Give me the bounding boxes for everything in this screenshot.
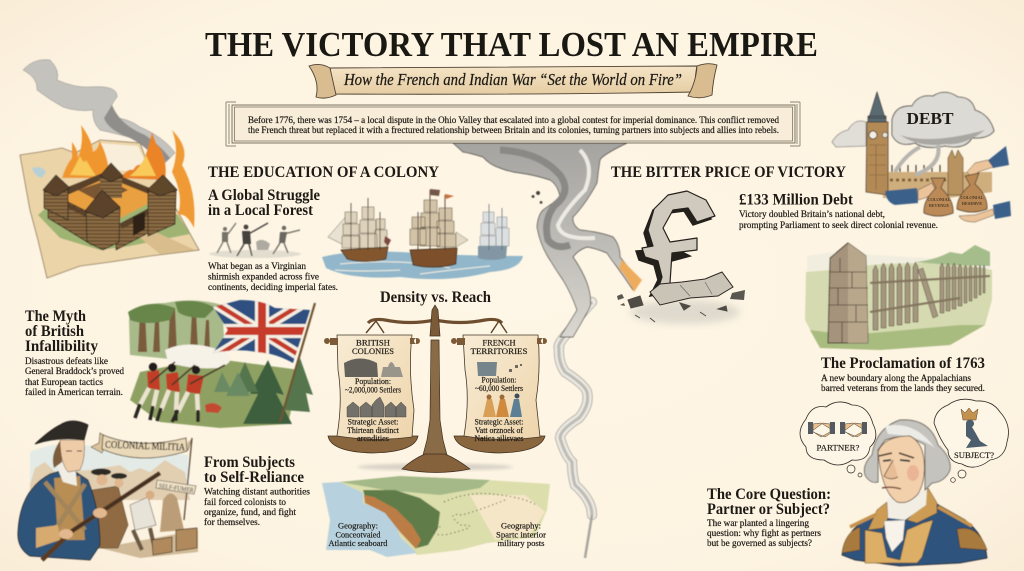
left asset value line two: arendities	[357, 433, 390, 443]
icon: native allies	[483, 394, 522, 417]
left asset value: Thirtean distinct	[347, 425, 400, 435]
label line one: Geography:	[338, 520, 378, 530]
upper right sleeve and hand	[986, 146, 1009, 168]
coat	[842, 503, 987, 566]
icon: handshake one	[808, 422, 835, 437]
left asset label: Strategic Asset:	[348, 416, 398, 426]
ornament left	[226, 102, 236, 146]
heading: The Core Question:	[707, 486, 831, 503]
body line two: General Braddock’s proved	[25, 366, 124, 377]
fence rail	[870, 276, 990, 312]
musket	[42, 473, 160, 560]
heading: The Proclamation of 1763	[821, 355, 985, 372]
banner pole	[184, 438, 192, 520]
pine trees	[243, 360, 292, 424]
right asset value line two: Natica ailisvaes	[474, 433, 524, 443]
section heading: education: THE EDUCATION OF A COLONY	[208, 164, 439, 181]
reserve bag	[957, 173, 987, 212]
cloud label: DEBT	[906, 109, 954, 128]
label line two: Spartc interior	[496, 530, 546, 540]
body: Victory doubled Britain’s national debt,	[739, 209, 885, 220]
parliament tower	[948, 150, 963, 195]
scale beam	[368, 319, 502, 323]
text block: core question	[707, 486, 831, 549]
rubble	[650, 272, 733, 305]
text block: global struggle	[208, 187, 338, 293]
body: Watching distant authorities	[204, 486, 310, 498]
icon: scattered dots	[509, 364, 522, 372]
redcoat soldiers	[135, 362, 225, 422]
epaulet right	[957, 528, 987, 550]
town	[30, 460, 190, 500]
ocean	[322, 482, 417, 557]
bag label one: COLONIAL	[928, 197, 951, 202]
neck stock	[55, 462, 77, 486]
body line three: that European tactics	[25, 377, 103, 388]
forest	[363, 490, 440, 548]
body line two: shirmish expanded across five	[208, 272, 319, 282]
icon: kneeling subject	[966, 420, 988, 448]
field	[805, 262, 992, 350]
background militia men	[92, 486, 128, 548]
left scroll heading: BRITISH	[356, 338, 390, 348]
body line three: continents, deciding imperial fates.	[208, 282, 338, 293]
right scroll heading line two: TERRITORIES	[470, 346, 528, 356]
cross belts	[45, 482, 85, 530]
left population label: Population:	[355, 376, 391, 386]
lower right sleeve and hand	[993, 201, 1011, 219]
intro line two: the French threat but replaced it with a frectured relationship between Britain and its colonies, turning partners into subjects and allies into rebels.	[248, 125, 779, 136]
debt cloud	[892, 92, 994, 147]
tricorn hat	[35, 421, 88, 444]
british flag	[212, 299, 310, 364]
left bowl	[328, 436, 418, 453]
main title: THE VICTORY THAT LOST AN EMPIRE	[205, 25, 818, 64]
sea	[322, 252, 523, 279]
revenue bag	[924, 178, 953, 216]
nose	[884, 460, 898, 479]
left population value: ~2,000,000 Settlers	[345, 384, 402, 394]
forest background	[129, 300, 225, 372]
icon: settler crowd	[344, 358, 378, 377]
illustration: ships at sea	[322, 189, 523, 279]
icon: sparse settlers	[477, 362, 497, 376]
smoke plumes	[895, 145, 939, 175]
ship one	[328, 198, 391, 262]
body: The war planted a lingering	[707, 518, 809, 529]
text block: myth of infallibility	[25, 308, 124, 398]
fort walls	[48, 192, 92, 245]
ship three	[478, 204, 509, 260]
illustration: parliament under debt cloud	[832, 92, 1011, 222]
bubble outline	[934, 399, 1008, 467]
waistcoat	[865, 520, 933, 563]
military path	[434, 494, 536, 535]
militia soldier coat	[18, 468, 100, 560]
trailing puffs	[847, 465, 862, 477]
sign text: SELF-FUMER	[158, 483, 195, 494]
debris	[628, 296, 727, 322]
brows and eyes	[879, 453, 914, 458]
subtitle text: How the French and Indian War “Set the World on Fire”	[343, 70, 682, 89]
hills	[340, 476, 490, 495]
sky wash	[30, 444, 190, 495]
body: A new boundary along the Appalachians	[821, 373, 971, 384]
face	[878, 436, 924, 503]
icon: handshake two	[840, 422, 867, 437]
body: Disastrous defeats like	[25, 356, 108, 367]
grass	[38, 195, 190, 250]
right asset value: Vatt orznoek of	[475, 425, 523, 435]
sign: self funded	[156, 480, 196, 494]
bag label two line two: RESERVE	[962, 201, 982, 206]
body line two: prompting Parliament to seek direct colonial revenue.	[739, 220, 938, 231]
illustration: Braddock's defeat with flag	[128, 296, 315, 428]
text block: self-reliance	[204, 454, 310, 528]
heading: The Myth	[25, 308, 86, 325]
fort interior	[55, 172, 165, 226]
heading: From Subjects	[204, 454, 295, 471]
icon: government building	[381, 362, 403, 377]
ribbon: colonial militia	[91, 433, 192, 453]
parliament	[883, 172, 992, 198]
stone boundary post	[828, 243, 868, 343]
heading: A Global Struggle	[208, 187, 320, 204]
ship two	[410, 189, 468, 267]
parchment map	[20, 140, 199, 278]
ground shading	[810, 325, 985, 350]
fort gate	[133, 212, 145, 236]
fence pickets	[873, 262, 985, 330]
heading line two: Partner or Subject?	[707, 501, 830, 518]
sky	[807, 252, 990, 290]
bubble label: SUBJECT?	[954, 450, 994, 460]
right bowl	[454, 436, 545, 453]
right asset label: Strategic Asset:	[474, 416, 524, 426]
ember at base of smoke	[619, 260, 642, 292]
right population label: Population:	[482, 374, 516, 384]
body line three: but be governed as subjects?	[707, 538, 812, 549]
body line four: failed in American terrain.	[25, 387, 123, 398]
bag label two: COLONIAL	[960, 195, 984, 200]
label line three: military posts	[498, 538, 545, 548]
left scroll heading line two: COLONIES	[352, 346, 394, 356]
right scroll heading: FRENCH	[482, 338, 516, 348]
flames	[62, 125, 110, 178]
land wash	[340, 478, 550, 555]
illustration: central smoke column	[453, 143, 642, 558]
fort smoke	[23, 60, 175, 168]
right population value: ~60,000 Settlers	[475, 383, 524, 393]
buff waistcoat	[54, 476, 85, 540]
left sleeve and hand	[885, 188, 918, 205]
flag pole	[280, 303, 315, 422]
intro text box	[226, 102, 800, 146]
body line two: question: why fight as pertners	[707, 528, 821, 539]
mouth	[882, 487, 901, 489]
hair	[864, 420, 950, 490]
body line four: for themselves.	[204, 517, 260, 528]
illustration: crumbling pound sign	[617, 191, 745, 324]
icon: thirteen colony houses	[347, 397, 406, 417]
neck stock	[887, 490, 927, 520]
section heading: bitter price: THE BITTER PRICE OF VICTORY	[611, 164, 846, 181]
bag label one line two: REVENUE	[929, 203, 949, 208]
dust	[630, 300, 740, 324]
bubble outline	[800, 402, 876, 465]
illustration: burning fort on a map	[20, 60, 199, 278]
clock tower	[866, 122, 888, 195]
label: left geography	[328, 520, 388, 548]
coastal cliffs	[364, 495, 421, 549]
portrait: colonial officer	[842, 420, 987, 566]
musket smoke	[165, 344, 230, 368]
trailing puffs	[951, 470, 966, 482]
collar left	[868, 502, 888, 530]
ornament right	[790, 102, 800, 146]
scale base	[402, 454, 470, 472]
crates	[152, 528, 197, 555]
pound body	[642, 191, 715, 292]
right scroll	[451, 335, 547, 443]
left scroll	[324, 335, 420, 443]
label line three: Atlantic seaboard	[328, 538, 388, 548]
body line two: fail forced colonists to	[204, 497, 286, 508]
label line two: Conceotvaied	[336, 530, 381, 540]
map: atlantic seaboard and interior	[322, 476, 550, 557]
intro line one: Before 1776, there was 1754 – a local dispute in the Ohio Valley that escalated into a global contest for imperial dominance. This conflict removed	[248, 115, 779, 126]
body: What began as a Virginian	[208, 261, 306, 272]
hands	[93, 508, 107, 518]
fort towers	[44, 190, 68, 220]
battlefield ground	[130, 358, 300, 428]
thought bubble: partner	[800, 402, 876, 477]
label line one: Geography:	[501, 520, 541, 530]
hanger knots	[366, 321, 507, 333]
dirt road	[133, 228, 195, 254]
heading line three: Infallibility	[25, 338, 98, 355]
epaulet left	[842, 527, 860, 553]
collar right	[907, 488, 937, 523]
label: right geography	[496, 520, 546, 548]
pound shadow	[636, 195, 711, 296]
bubble label: PARTNER?	[816, 442, 860, 452]
heading: density vs reach: Density vs. Reach	[380, 289, 491, 306]
heading: £133 Million Debt	[739, 192, 854, 208]
heading line two: of British	[25, 323, 84, 340]
shoulder straps	[850, 507, 972, 527]
illustration: colonial militia	[18, 421, 198, 560]
pale interior	[470, 495, 545, 540]
ribbon text: COLONIAL MILITIA	[105, 440, 186, 453]
thought bubble: subject	[934, 399, 1008, 482]
cheeks	[907, 465, 919, 481]
chart: balance scale comparison	[324, 305, 547, 472]
jabot ruffle	[884, 520, 905, 552]
hills	[915, 245, 990, 266]
body line three: organize, fund, and fight	[204, 507, 296, 518]
face	[60, 440, 84, 472]
ground	[100, 530, 198, 558]
workers	[130, 497, 156, 530]
scale post	[423, 340, 447, 455]
hair	[53, 441, 62, 468]
text block: debt	[739, 192, 938, 231]
text block: proclamation	[821, 355, 985, 394]
illustration: forest skirmish	[209, 223, 301, 258]
icon: crown	[961, 408, 978, 420]
body line two: barred veterans from the lands they secured.	[821, 383, 985, 394]
illustration: proclamation boundary post and fence	[805, 243, 992, 350]
heading line two: in a Local Forest	[208, 202, 314, 219]
table shadow	[357, 464, 513, 470]
heading line two: to Self-Reliance	[204, 469, 304, 486]
subtitle scroll banner	[309, 64, 717, 98]
ash specks	[532, 191, 542, 204]
